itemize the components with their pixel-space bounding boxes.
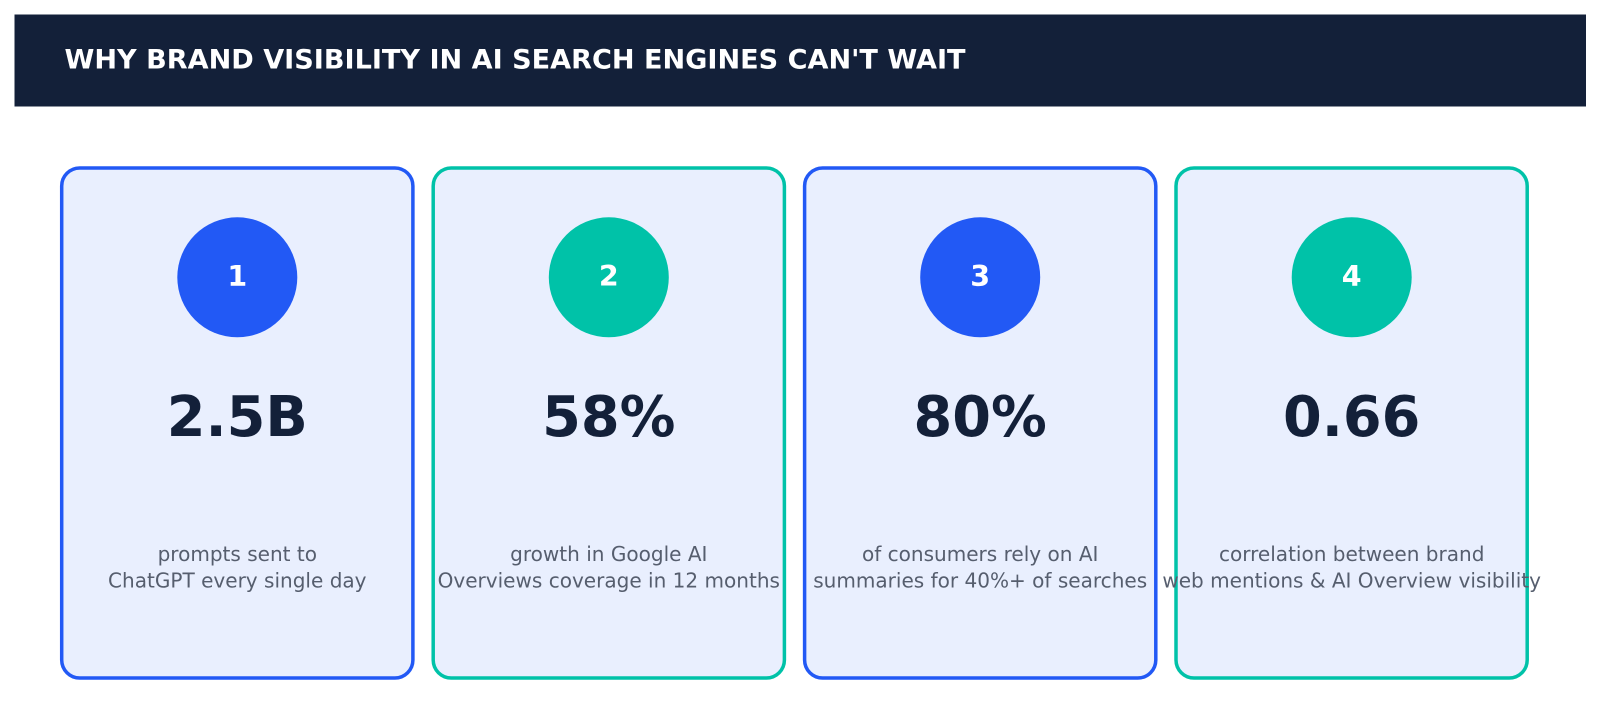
- badge 4: 4: [1342, 260, 1362, 293]
- badge 2: [549, 217, 669, 337]
- description 4: web mentions & AI Overview visibility: [1162, 568, 1541, 592]
- stat 2.5B: 2.5B: [167, 385, 308, 450]
- header banner: [14, 14, 1586, 106]
- title: WHY BRAND VISIBILITY IN AI SEARCH ENGINES CAN'T WAIT: [64, 44, 966, 75]
- stat 0.66: 0.66: [1283, 385, 1420, 450]
- badge 1: 1: [227, 260, 247, 293]
- badge 3: 3: [970, 260, 990, 293]
- badge 1: [177, 217, 297, 337]
- stat 80%: 80%: [914, 385, 1047, 450]
- panel: card 4: [1162, 168, 1541, 678]
- badge 2: 2: [599, 260, 619, 293]
- badge 3: [920, 217, 1040, 337]
- description 3: of consumers rely on AI: [862, 542, 1098, 566]
- panel: card 3: [805, 168, 1156, 678]
- description 1: ChatGPT every single day: [108, 568, 367, 592]
- description 1: prompts sent to: [158, 542, 317, 566]
- description 3: summaries for 40%+ of searches: [813, 568, 1147, 592]
- description 4: correlation between brand: [1219, 542, 1484, 566]
- stat 58%: 58%: [542, 385, 675, 450]
- panel: card 1: [62, 168, 413, 678]
- badge 4: [1292, 217, 1412, 337]
- description 2: growth in Google AI: [510, 542, 707, 566]
- description 2: Overviews coverage in 12 months: [438, 568, 780, 592]
- panel: card 2: [433, 168, 784, 678]
